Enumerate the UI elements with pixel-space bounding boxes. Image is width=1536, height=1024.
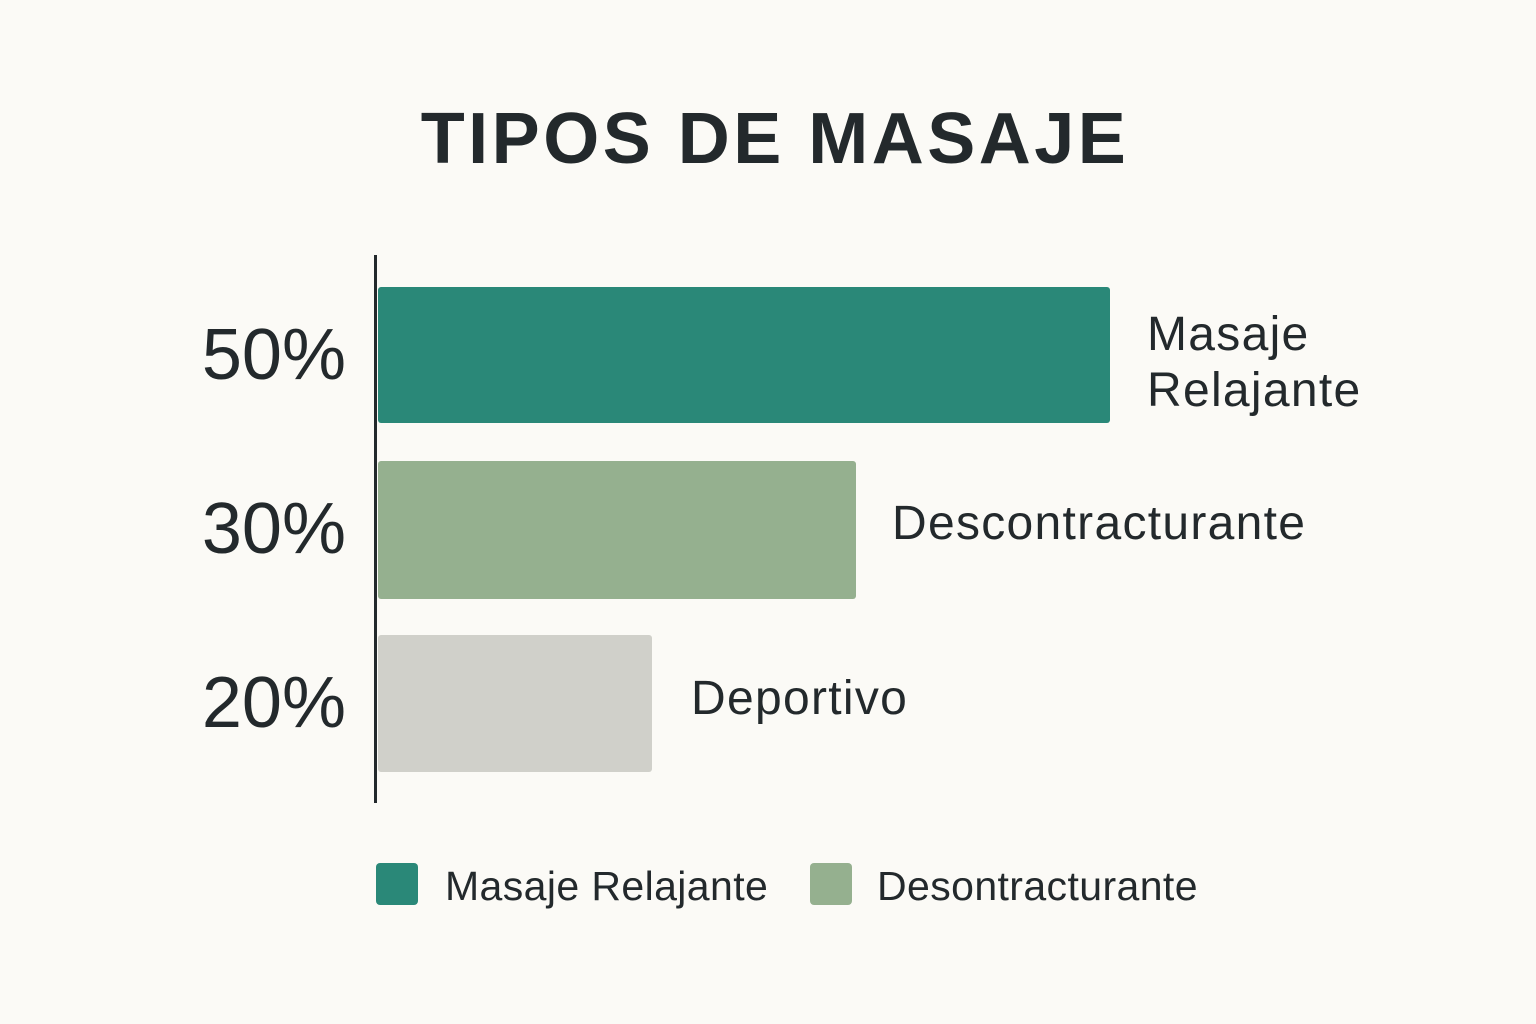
bar: deportivo [378,635,652,772]
axis [374,255,377,803]
title: TIPOS DE MASAJE [421,99,1129,179]
label: masaje relajante: Masaje [1147,308,1310,361]
label: deportivo: Deportivo [691,672,908,725]
legend text masaje relajante: Masaje Relajante [445,863,768,909]
legend swatch teal [376,863,418,905]
bar: masaje relajante [378,287,1110,423]
label: descontracturante: Descontracturante [892,497,1306,550]
label: masaje relajante: Relajante [1147,364,1362,417]
value label 20%: 20% [202,663,346,743]
chart [374,255,1110,803]
value label 30%: 30% [202,489,346,569]
value label 50%: 50% [202,315,346,395]
legend text desontracturante: Desontracturante [877,863,1198,909]
legend [376,863,1198,909]
label: masaje relajante [1147,308,1362,417]
bar: descontracturante [378,461,856,599]
legend swatch green [810,863,852,905]
